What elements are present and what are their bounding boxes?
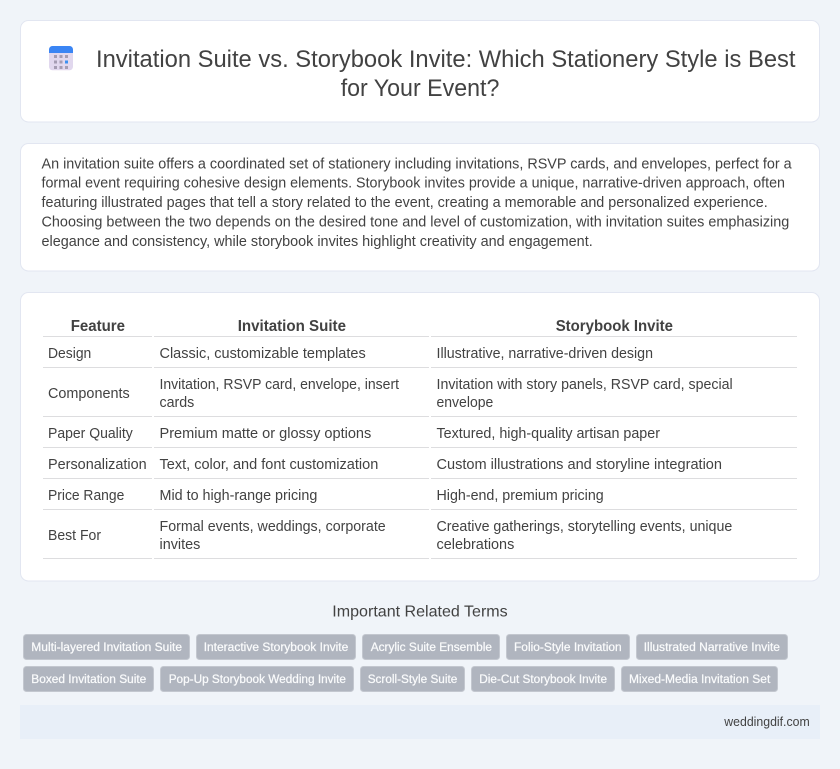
table header row xyxy=(71,318,673,335)
text block: summary: featuring illustrated pages that tell a story related to the event, creating a memorable and personalized experience. xyxy=(42,195,768,211)
table row: best for: celebrations xyxy=(436,537,514,553)
table row: personalization: Personalization xyxy=(48,457,147,473)
tag xyxy=(636,634,788,660)
table row: best for: invites xyxy=(160,537,200,553)
footer bar xyxy=(20,705,820,739)
tag: Acrylic Suite Ensemble xyxy=(371,640,492,654)
table row: components: Components xyxy=(48,386,130,402)
text block: summary: formal event requiring cohesive design elements. Storybook invites provide a unique, narrative-driven approach, often xyxy=(42,176,785,192)
table row: paper quality: Paper Quality xyxy=(48,426,133,442)
text block: summary xyxy=(42,156,792,250)
text block: summary: An invitation suite offers a coordinated set of stationery including invitations, RSVP cards, and envelopes, perfect for a xyxy=(42,156,792,172)
tag xyxy=(622,666,778,692)
tag xyxy=(506,634,630,660)
title: Invitation Suite vs. Storybook Invite: Which Stationery Style is Best xyxy=(96,46,796,73)
tag group: related terms xyxy=(24,634,788,692)
table header row: Invitation Suite xyxy=(238,318,346,335)
tag: Folio-Style Invitation xyxy=(514,640,622,654)
text block: summary: Choosing between the two depends on the desired tone and level of customization, with invitation suites emphasizing xyxy=(42,214,789,230)
icon: calendar xyxy=(49,46,73,70)
table row: price range: Mid to high-range pricing xyxy=(160,488,317,504)
tag: Illustrated Narrative Invite xyxy=(644,640,780,654)
tag xyxy=(160,666,354,692)
tag: Interactive Storybook Invite xyxy=(204,640,349,654)
text block: summary: elegance and consistency, while storybook invites highlight creativity and engagement. xyxy=(42,234,593,250)
tag xyxy=(362,634,500,660)
title: for Your Event? xyxy=(341,75,499,102)
table row: components: envelope xyxy=(436,395,493,411)
title xyxy=(96,46,796,102)
table row: components: Invitation with story panels, RSVP card, special xyxy=(436,377,733,393)
table row: best for: Creative gatherings, storytelling events, unique xyxy=(436,519,732,535)
table row: personalization: Text, color, and font customization xyxy=(160,457,378,473)
tag: Scroll-Style Suite xyxy=(368,672,458,686)
table row: price range: Price Range xyxy=(48,488,124,504)
table row: personalization: Custom illustrations and storyline integration xyxy=(436,457,722,473)
table header row: Feature xyxy=(71,318,125,335)
tag: Multi-layered Invitation Suite xyxy=(31,640,182,654)
panel: title header xyxy=(20,20,820,122)
table row: components: Invitation, RSVP card, envelope, insert xyxy=(160,377,399,393)
tag xyxy=(24,634,190,660)
table row: paper quality: Premium matte or glossy options xyxy=(160,426,371,442)
table row: best for xyxy=(48,519,732,553)
tag xyxy=(196,634,356,660)
table row: price range: High-end, premium pricing xyxy=(436,488,604,504)
heading: important related terms: Important Related Terms xyxy=(332,604,508,621)
table row: best for: Formal events, weddings, corporate xyxy=(160,519,386,535)
table row: personalization xyxy=(48,457,722,473)
table row: design: Illustrative, narrative-driven design xyxy=(436,346,653,362)
tag xyxy=(472,666,614,692)
table row: components: cards xyxy=(160,395,194,411)
tag xyxy=(24,666,154,692)
tag: Boxed Invitation Suite xyxy=(31,672,147,686)
table row: design xyxy=(48,346,653,362)
panel: comparison table xyxy=(20,292,820,581)
table row: design: Classic, customizable templates xyxy=(160,346,366,362)
table row: components xyxy=(48,377,733,411)
footer bar: weddingdif.com xyxy=(723,715,810,729)
tag xyxy=(360,666,464,692)
table row: best for: Best For xyxy=(48,528,101,544)
tag: Die-Cut Storybook Invite xyxy=(479,672,607,686)
table header row: Storybook Invite xyxy=(556,318,673,335)
table row: price range xyxy=(48,488,604,504)
panel: summary paragraph xyxy=(20,144,820,271)
table row: paper quality xyxy=(48,426,660,442)
table row: paper quality: Textured, high-quality artisan paper xyxy=(436,426,660,442)
tag: Pop-Up Storybook Wedding Invite xyxy=(169,672,346,686)
table row: design: Design xyxy=(48,346,91,362)
tag: Mixed-Media Invitation Set xyxy=(629,672,771,686)
